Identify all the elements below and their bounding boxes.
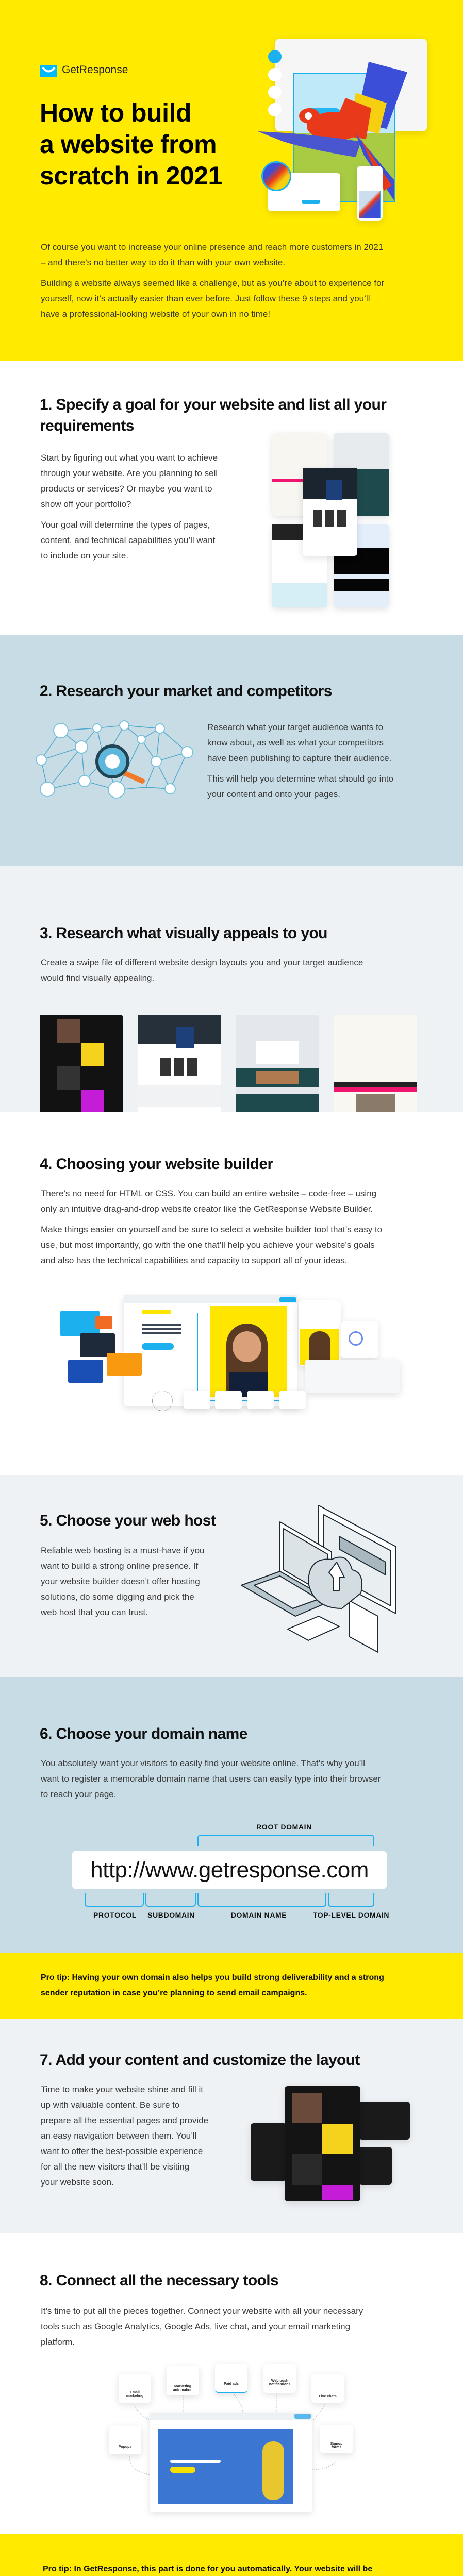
illustration: devices and cloud: [241, 1505, 396, 1653]
illustration: tools connected to website: Web push: [271, 2379, 288, 2383]
intro text: Of course you want to increase your online presence and reach more customers in 2021: [41, 242, 383, 252]
panel: header: [0, 0, 463, 361]
text: tools such as Google Analytics, Google Ads, live chat, and your email marketing: [41, 2321, 350, 2331]
text: [41, 2306, 363, 2347]
heading: 6. Choose your domain name: [40, 1725, 247, 1742]
text: prepare all the essential pages and provide: [41, 2115, 208, 2125]
text: know about, as well as what your competitors: [207, 738, 384, 748]
text: platform.: [41, 2337, 75, 2347]
text: up with valuable content. Be sure to: [41, 2100, 179, 2110]
text: an easy navigation between them. You’ll: [41, 2131, 196, 2141]
diagram: URL anatomy: TOP-LEVEL DOMAIN: [313, 1911, 389, 1919]
intro text: [41, 242, 383, 267]
illustration: dark templates: [249, 2086, 412, 2206]
text: want to build a strong online presence. If: [41, 1561, 198, 1571]
illustration: tools connected to website: automation: [173, 2388, 192, 2392]
text: [41, 2084, 208, 2187]
panel: step 1: [0, 361, 463, 635]
text: want to register a memorable domain name that users can easily type into their browser: [41, 1774, 381, 1784]
panel: step 4: Make things easier on yourself and be sure to select a website builder tool that’s easy to: [41, 1225, 382, 1234]
text: web host that you can trust.: [41, 1607, 148, 1617]
heading: 8. Connect all the necessary tools: [40, 2272, 278, 2289]
heading: [40, 396, 387, 434]
panel: step 3: [0, 866, 463, 1112]
text: have been publishing to capture their audience.: [207, 753, 391, 763]
callout: pro tip 2: Pro tip: In GetResponse, this part is done for you automatically. Your website will be: [43, 2565, 372, 2573]
callout: pro tip 2: [0, 2534, 463, 2576]
text: show off your portfolio?: [41, 499, 131, 509]
panel: header: have a professional-looking website of your own in no time!: [41, 309, 270, 319]
title: scratch in 2021: [40, 161, 222, 190]
text: [41, 958, 363, 983]
illustration: tools connected to website: forms: [332, 2446, 341, 2449]
title: [40, 98, 222, 190]
panel: step 2: your content and onto your pages.: [207, 789, 340, 799]
text: for all the new visitors that’ll be visiting: [41, 2162, 189, 2172]
illustration: tools connected to website: Marketing: [174, 2385, 191, 2388]
text: There’s no need for HTML or CSS. You can build an entire website – code-free – using: [41, 1189, 376, 1198]
text: Create a swipe file of different website design layouts you and your target audience: [41, 958, 363, 968]
panel: step 2: [0, 635, 463, 866]
text: [41, 1758, 381, 1799]
illustration: website builder editor: [60, 1295, 402, 1414]
logo: [40, 64, 128, 77]
illustration: tools connected to website: Paid ads: [224, 2382, 239, 2386]
text: want to offer the best-possible experience: [41, 2146, 203, 2156]
text: would find visually appealing.: [41, 973, 154, 983]
illustration: tools connected to website: Live chats: [319, 2395, 337, 2398]
panel: step 2: This will help you determine what should go into: [207, 774, 393, 784]
illustration: website builder with parrot: [258, 39, 429, 225]
panel: header: yourself, now it’s actually easier than ever before. Just follow these 9 steps and you’ll: [41, 294, 370, 303]
text: It’s time to put all the pieces together. Connect your website with all your necessary: [41, 2306, 363, 2316]
text: [41, 1189, 376, 1214]
heading: 4. Choosing your website builder: [40, 1156, 273, 1173]
panel: step 6: [0, 1677, 463, 1953]
illustration: people network with magnifier: [36, 720, 193, 799]
text: only an intuitive drag-and-drop website creator like the GetResponse Website Builder.: [41, 1204, 373, 1214]
heading: 1. Specify a goal for your website and list all your: [40, 396, 386, 413]
label: root domain: ROOT DOMAIN: [256, 1823, 312, 1831]
callout: pro tip 1: Pro tip: Having your own domain also helps you build strong deliverability and a strong: [41, 1973, 384, 1982]
url box: [72, 1851, 387, 1889]
text: your website builder doesn’t offer hosting: [41, 1577, 200, 1586]
intro text: – and there’s no better way to do it than with your own website.: [41, 258, 285, 267]
illustration: tools connected to website: Popups: [119, 2445, 131, 2449]
text: [207, 722, 391, 763]
panel: step 1: to include on your site.: [41, 551, 128, 561]
panel: header: Building a website always seemed like a challenge, but as you’re about to experience for: [41, 278, 384, 288]
text: solutions, do some digging and pick the: [41, 1592, 194, 1602]
panel: step 4: [0, 1112, 463, 1475]
text: [41, 453, 218, 509]
heading: 5. Choose your web host: [40, 1512, 216, 1529]
text: Time to make your website shine and fill it: [41, 2084, 203, 2094]
illustration: tools connected to website: Email: [130, 2391, 140, 2394]
panel: step 1: Your goal will determine the types of pages,: [41, 520, 210, 530]
text: You absolutely want your visitors to easily find your website online. That’s why you’ll: [41, 1758, 365, 1768]
illustration: tools connected to website: [107, 2367, 355, 2516]
illustration: tools connected to website: marketing: [126, 2394, 143, 2398]
text: to reach your page.: [41, 1789, 116, 1799]
panel: step 5: [0, 1475, 463, 1677]
icon: envelope logo: [40, 65, 57, 77]
heading: 7. Add your content and customize the layout: [40, 2052, 360, 2069]
text: Start by figuring out what you want to achieve: [41, 453, 218, 463]
text: through your website. Are you planning to sell: [41, 468, 218, 478]
illustration: tools connected to website: notifications: [269, 2383, 290, 2386]
panel: step 8: [0, 2233, 463, 2534]
template thumbnails: [40, 1015, 417, 1112]
panel: step 4: and also has the technical capabilities and capacity to support all of your ideas.: [41, 1256, 347, 1265]
text: [41, 1546, 204, 1617]
illustration: tools connected to website: Signup: [330, 2442, 342, 2446]
panel: step 7: [0, 2019, 463, 2233]
panel: step 4: use, but most importantly, go with the one that’ll help you achieve your website’s goals: [41, 1240, 375, 1250]
title: a website from: [40, 130, 217, 159]
diagram: URL anatomy: PROTOCOL: [93, 1911, 137, 1919]
text: your website soon.: [41, 2177, 114, 2187]
heading: 2. Research your market and competitors: [40, 683, 332, 700]
illustration: website templates collage: [270, 433, 391, 612]
text: Research what your target audience wants to: [207, 722, 383, 732]
diagram: URL anatomy: SUBDOMAIN: [147, 1911, 195, 1919]
diagram: URL anatomy: [72, 1823, 389, 1919]
text: products or services? Or maybe you want to: [41, 484, 212, 494]
callout: pro tip 1: sender reputation in case you’re planning to send email campaigns.: [41, 1989, 307, 1997]
panel: step 1: content, and technical capabilities you’ll want: [41, 535, 215, 545]
logo: GetResponse: [62, 64, 128, 76]
url box: http://www.getresponse.com: [90, 1857, 369, 1883]
text: Reliable web hosting is a must-have if you: [41, 1546, 204, 1555]
callout: pro tip 1: [0, 1953, 463, 2019]
diagram: URL anatomy: DOMAIN NAME: [231, 1911, 287, 1919]
title: How to build: [40, 98, 191, 127]
heading: 3. Research what visually appeals to you: [40, 925, 327, 942]
heading: requirements: [40, 417, 134, 434]
